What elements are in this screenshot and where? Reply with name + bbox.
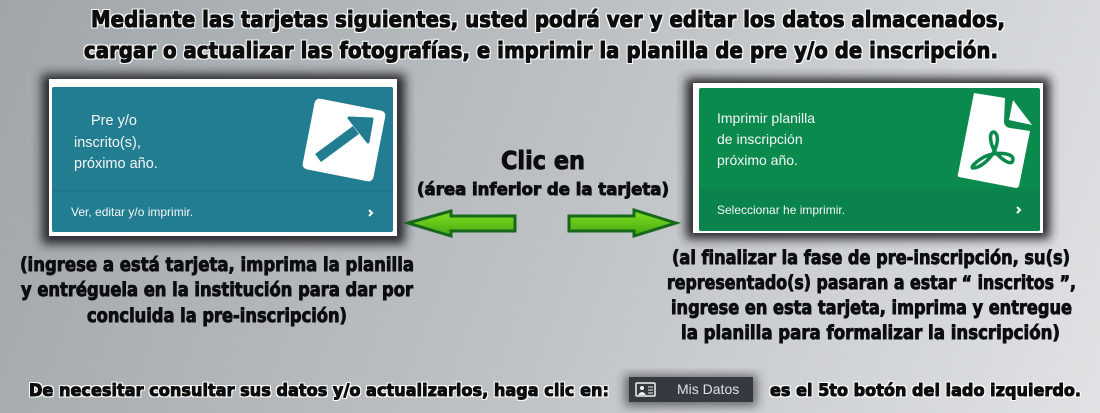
title: Mediante las tarjetas siguientes, usted podrá ver y editar los datos almacenados, [91, 8, 1005, 33]
text: right note [667, 248, 1076, 344]
button: mis datos: Mis Datos [677, 381, 739, 397]
button: mis datos [625, 375, 757, 406]
heading: clic en: Clic en [501, 146, 585, 175]
title: cargar o actualizar las fotografías, e imprimir la planilla de pre y/o de inscripción. [84, 39, 998, 64]
card link: Ver, editar y/o imprimir. [71, 205, 193, 219]
subheading: (área inferior de la tarjeta) [417, 180, 669, 199]
card text: próximo año. [717, 152, 798, 168]
arrow: left [408, 211, 515, 236]
card text: de inscripción [717, 131, 803, 147]
text: bottom right: es el 5to botón del lado izquierdo. [770, 381, 1081, 401]
panel: teal card [42, 74, 405, 244]
panel: green card [686, 78, 1050, 239]
arrow: right [569, 210, 676, 236]
card text: inscrito(s), [74, 135, 141, 151]
icon: pdf file [958, 93, 1032, 188]
card link: Seleccionar he imprimir. [717, 203, 845, 217]
text: left note: concluida la pre-inscripción) [87, 306, 347, 327]
card text: Imprimir planilla [717, 110, 815, 126]
text: right note: la planilla para formalizar la inscripción) [681, 323, 1060, 344]
icon: arrow [302, 98, 386, 182]
card text [717, 110, 815, 168]
icon: id card [636, 383, 655, 396]
card text [74, 113, 158, 172]
card text: próximo año. [74, 156, 158, 172]
text: left note: y entréguela en la institución para dar por [21, 280, 414, 301]
text: left note [20, 255, 414, 327]
text: bottom left: De necesitar consultar sus datos y/o actualizarlos, haga clic en: [29, 381, 609, 401]
title [84, 8, 1005, 64]
text: left note: (ingrese a está tarjeta, imprima la planilla [20, 255, 414, 276]
icon: chevron [369, 210, 372, 216]
icon: chevron [1017, 207, 1020, 213]
card text: Pre y/o [91, 113, 137, 129]
